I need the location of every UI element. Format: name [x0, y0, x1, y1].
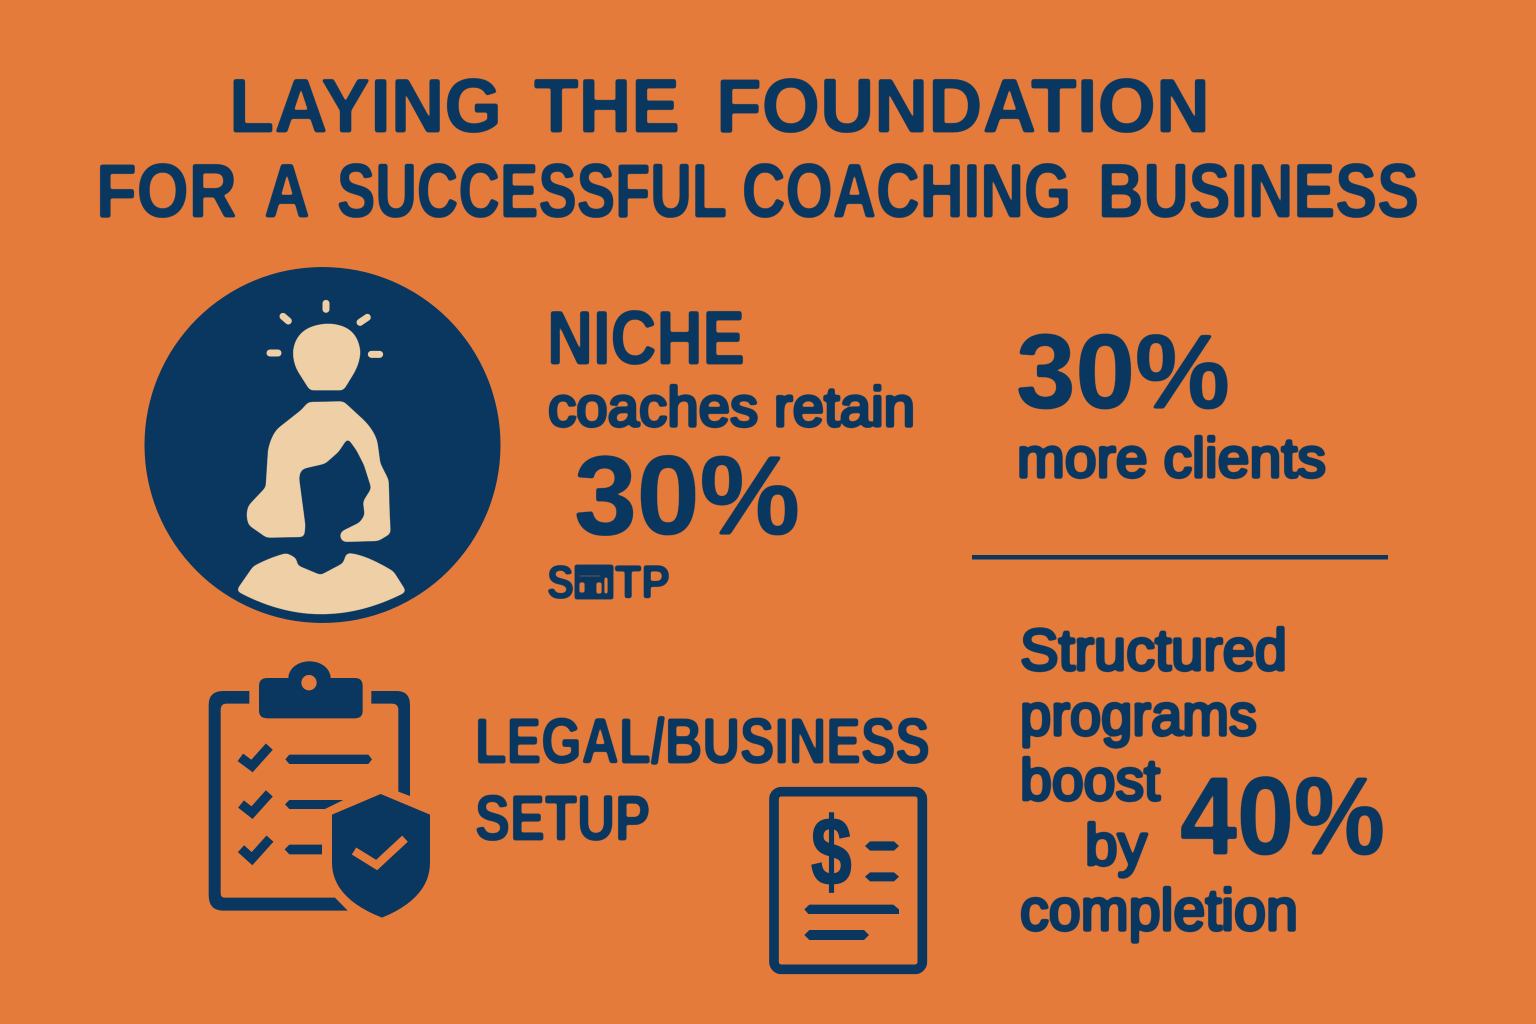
- niche text block: coaches retain: [548, 375, 915, 438]
- legal/business setup text: SETUP: [475, 782, 650, 854]
- stat: 30% more clients: [1016, 313, 1326, 489]
- clipboard clip: [259, 661, 363, 718]
- hair: [247, 402, 390, 542]
- clipboard outline: [209, 691, 410, 911]
- stat: 30% more clients: 30%: [1016, 313, 1230, 431]
- divider: [972, 555, 1388, 560]
- structured programs stat: [1020, 618, 1385, 943]
- icon: coach with lightbulb in circle: [144, 267, 500, 623]
- garbled setup label: S: [547, 556, 574, 608]
- structured programs stat: Structured: [1020, 618, 1287, 683]
- lightbulb: [293, 324, 360, 390]
- title: BUSINESS: [1098, 149, 1419, 234]
- light rays: [270, 303, 380, 354]
- icon: invoice document with dollar sign: $: [811, 798, 852, 906]
- structured programs stat: by: [1085, 813, 1147, 878]
- title: THE: [534, 64, 680, 149]
- niche text block: NICHE: [547, 296, 745, 381]
- title: FOR: [96, 149, 237, 234]
- title: [96, 64, 1419, 234]
- title: SUCCESSFUL: [337, 149, 727, 234]
- title: FOUNDATION: [716, 64, 1210, 149]
- niche text block: [547, 296, 915, 608]
- checklist lines: [285, 755, 372, 854]
- legal/business setup text: [475, 705, 930, 854]
- icon: invoice document with dollar sign: [774, 792, 922, 969]
- stat: 30% more clients: more clients: [1017, 426, 1326, 489]
- garbled setup label: [547, 556, 670, 608]
- title: LAYING: [229, 64, 502, 149]
- niche text block: 30%: [574, 433, 800, 558]
- legal/business setup text: LEGAL/BUSINESS: [475, 705, 930, 777]
- shoulders: [237, 553, 406, 614]
- checkmarks: [240, 747, 270, 859]
- icon: clipboard with checklist and shield: [209, 661, 430, 918]
- structured programs stat: boost: [1020, 748, 1160, 813]
- title: A: [264, 149, 310, 234]
- structured programs stat: completion: [1020, 878, 1298, 943]
- structured programs stat: programs: [1020, 683, 1257, 748]
- shield with check: [332, 794, 430, 918]
- garbled setup label: TP: [615, 556, 670, 608]
- structured programs stat: 40%: [1180, 755, 1385, 878]
- title: COACHING: [742, 149, 1071, 234]
